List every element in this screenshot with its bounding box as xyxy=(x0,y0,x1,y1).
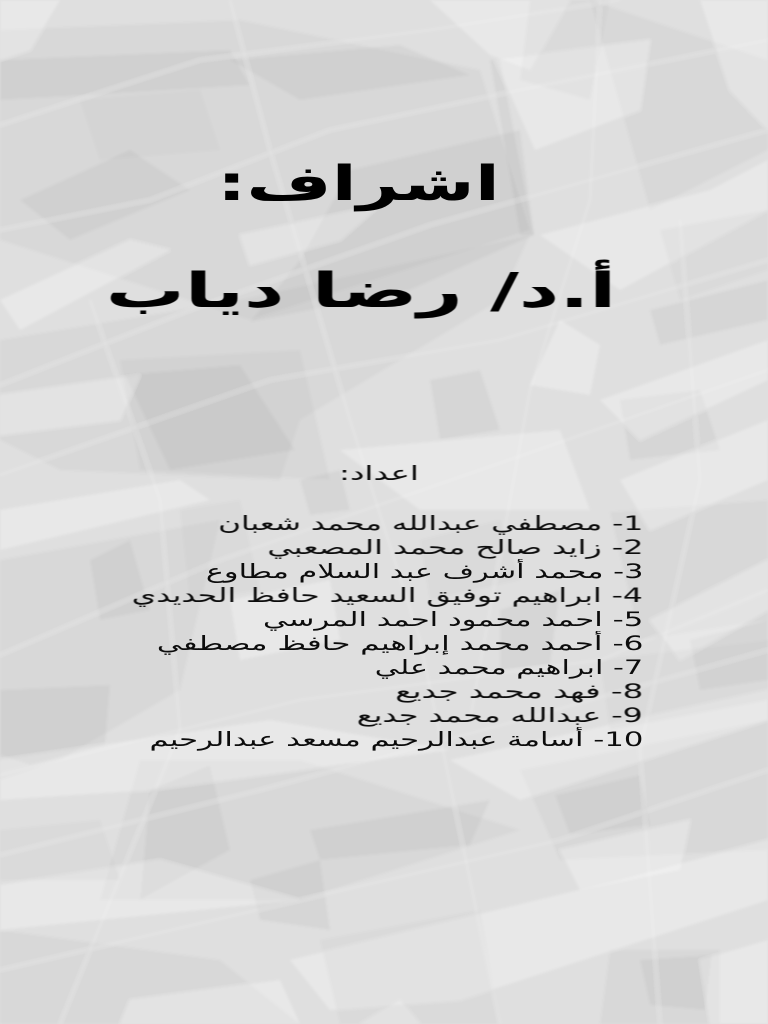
list: team members xyxy=(132,512,643,751)
list: team members: 5- احمد محمود احمد المرسي xyxy=(263,608,643,631)
list: team members: 1- مصطفي عبدالله محمد شعبان xyxy=(218,512,643,535)
list: team members: 7- ابراهيم محمد علي xyxy=(375,656,643,679)
heading: supervision: اشراف: xyxy=(217,156,500,212)
list: team members: 3- محمد أشرف عبد السلام مطاوع xyxy=(205,560,643,583)
list: team members: 2- زايد صالح محمد المصعبي xyxy=(267,536,643,559)
list: team members: 8- فهد محمد جديع xyxy=(395,680,643,703)
label: prepared by: اعداد: xyxy=(339,462,419,485)
list: team members: 10- أسامة عبدالرحيم مسعد عبدالرحيم xyxy=(149,728,643,751)
list: team members: 4- ابراهيم توفيق السعيد حافظ الحديدي xyxy=(132,584,643,607)
list: team members: 9- عبدالله محمد جديع xyxy=(357,704,643,727)
list: team members: 6- أحمد محمد إبراهيم حافظ مصطفي xyxy=(156,632,643,655)
heading: supervisor name: أ.د/ رضا دياب xyxy=(106,263,616,319)
